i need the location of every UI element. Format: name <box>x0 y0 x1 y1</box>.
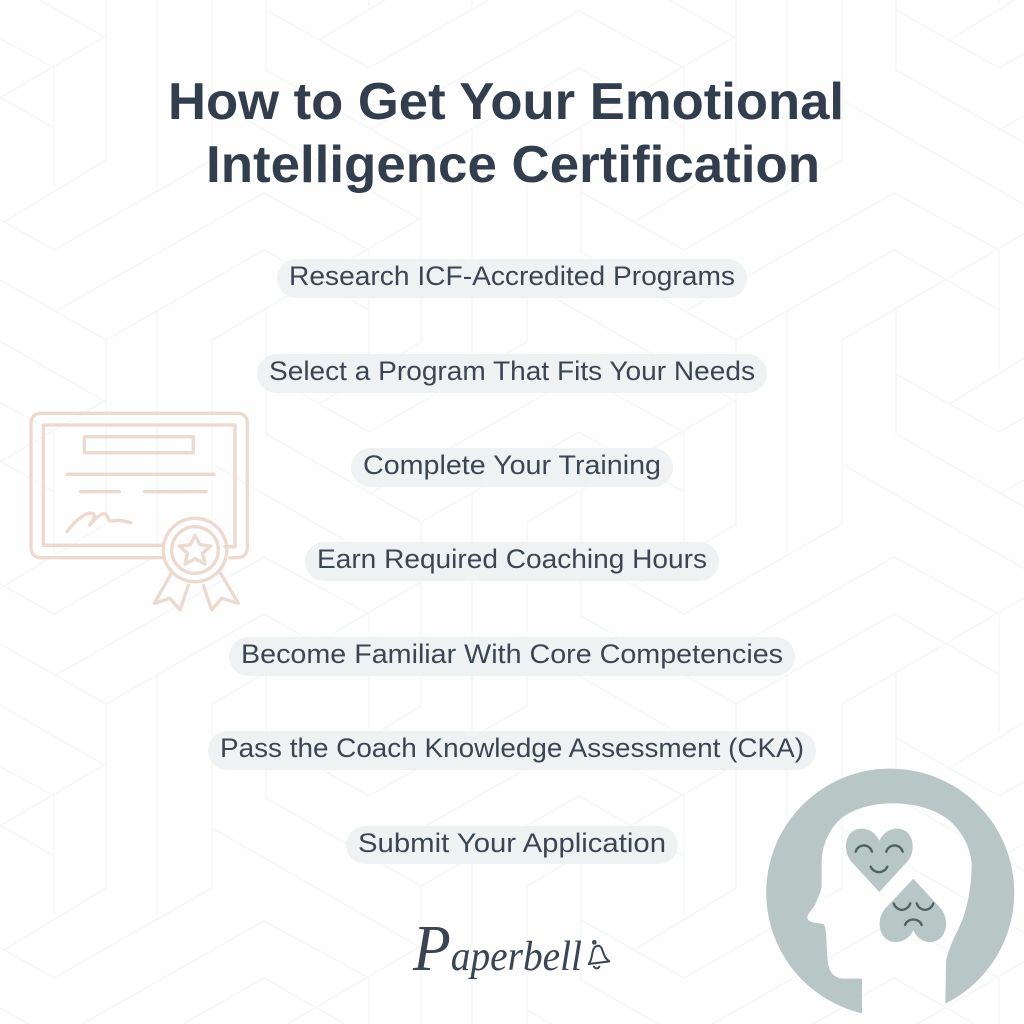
logo: Paperbell wordmark: Paperbell <box>412 912 582 985</box>
step 3: complete training: Complete Your Training <box>363 450 661 480</box>
step 5: core competencies: Become Familiar With Core Competencies <box>241 639 783 669</box>
step 1: research programs <box>277 259 747 298</box>
step 4: coaching hours: Earn Required Coaching Hours <box>317 544 707 574</box>
title: How to Get Your Emotional <box>168 73 844 131</box>
step 7: submit application <box>346 826 678 864</box>
step 7: submit application: Submit Your Application <box>358 828 666 858</box>
icon: bell <box>589 941 609 968</box>
step 1: research programs: Research ICF-Accredited Programs <box>289 261 735 291</box>
icon: certificate with rosette <box>31 413 247 610</box>
icon: head with happy and sad hearts <box>766 769 1014 1013</box>
title <box>168 73 844 194</box>
icon: sad heart <box>880 879 946 942</box>
step 4: coaching hours <box>305 542 719 581</box>
icon: happy heart <box>846 829 913 892</box>
step 6: knowledge assessment: Pass the Coach Knowledge Assessment (CKA) <box>220 733 804 763</box>
step 5: core competencies <box>229 637 795 676</box>
title: Intelligence Certification <box>206 136 820 194</box>
step 3: complete training <box>351 448 673 487</box>
step 2: select a program: Select a Program That Fits Your Needs <box>269 356 755 386</box>
